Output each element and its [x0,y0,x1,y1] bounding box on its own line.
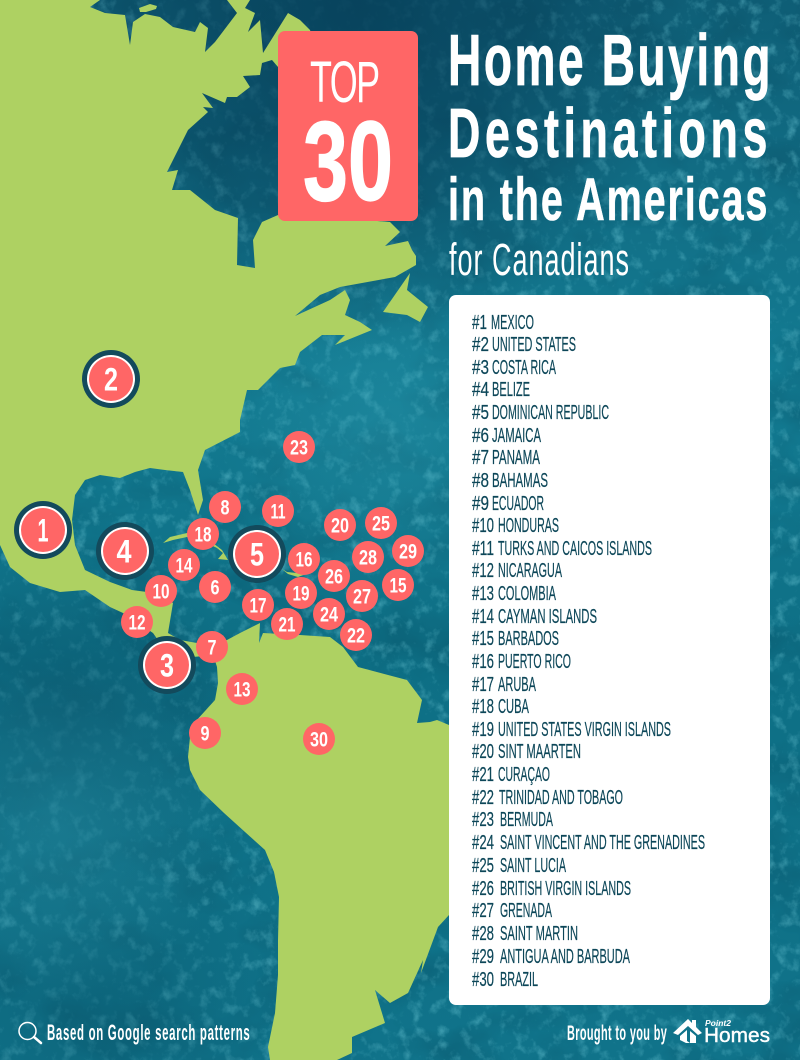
pin 4 [96,522,154,580]
list row 24: #24 [472,832,494,854]
pin 26: 26 [325,566,343,588]
badge: Top 30: TOP [310,50,380,115]
list row 29: ANTIGUA AND BARBUDA [500,946,630,968]
list row 13: COLOMBIA [498,583,556,605]
list row 29: #29 [472,946,494,968]
pin 27 [346,580,378,612]
pin 13: 13 [234,678,250,702]
title: in the Americas [448,166,767,233]
list row 9 [472,493,544,515]
list row 18: #18 [472,696,494,718]
pin 10: 10 [152,580,170,604]
list row 14: #14 [472,606,494,628]
list row 2: #2 [472,334,489,356]
list row 9: #9 [472,493,489,515]
list row 16: #16 [472,651,494,673]
icon: Point2 Homes house logo [673,1019,702,1043]
list row 16: PUERTO RICO [498,651,571,673]
pin 29 [392,535,424,567]
list row 24 [472,832,705,854]
pin 17 [242,589,274,621]
pin 25 [365,507,397,539]
list row 4: BELIZE [492,379,530,401]
pin 19 [285,577,317,609]
pin 16: 16 [296,548,312,572]
pin 16 [288,543,320,575]
list row 17: #17 [472,674,494,696]
pin 26 [318,560,350,592]
pin 28 [352,541,384,573]
list row 6: #6 [472,425,489,447]
list row 25: SAINT LUCIA [500,855,566,877]
pin 24: 24 [320,604,338,626]
pin 28: 28 [359,546,377,570]
list row 13: #13 [472,583,494,605]
list row 21 [472,764,550,786]
title: for Canadians [449,234,629,285]
pin 6: 6 [210,576,220,600]
pin 5 [228,525,286,583]
list row 7: #7 [472,447,489,469]
pin 24 [313,598,345,630]
badge: Top 30: 30 [303,98,393,224]
logo: Point2 Homes: Homes [704,1025,770,1047]
pin 25: 25 [372,512,390,536]
list row 19 [472,719,671,741]
list row 23: #23 [472,809,494,831]
pin 30 [303,723,335,755]
title [448,19,771,285]
list row 1 [472,312,534,334]
list row 22: TRINIDAD AND TOBAGO [499,787,623,809]
pin 22: 22 [347,624,365,648]
list row 7 [472,447,540,469]
list row 8: BAHAMAS [492,470,548,492]
list row 27: GRENADA [500,900,552,922]
pin 8 [209,491,241,523]
list row 14: CAYMAN ISLANDS [498,606,597,628]
pin 11: 11 [270,500,286,524]
list row 7: PANAMA [492,447,540,469]
pin 14 [168,549,200,581]
land: North America and Central America [0,0,416,660]
pin 15 [382,569,414,601]
pin 12: 12 [128,612,146,634]
pin 30: 30 [310,728,328,752]
list row 1: MEXICO [491,312,534,334]
pin 23 [283,431,315,463]
pin 7: 7 [208,636,216,660]
pin 23: 23 [290,436,308,460]
land: arctic island sliver [139,4,157,12]
list row 16 [472,651,571,673]
list row 30: #30 [472,969,494,991]
list row 23 [472,809,553,831]
list row 12: NICARAGUA [498,560,562,582]
list row 25: #25 [472,855,494,877]
icon: magnifying glass [19,1022,41,1043]
list row 13 [472,583,556,605]
list row 30: BRAZIL [500,969,538,991]
list row 19: #19 [472,719,494,741]
source note: Based on Google search patterns [47,1020,250,1045]
list row 4 [472,379,530,401]
list row 18: CUBA [498,696,529,718]
list row 14 [472,606,597,628]
title: Destinations [448,95,767,172]
pin 14: 14 [176,554,193,578]
list row 10: #10 [472,515,494,537]
land: Hispaniola fragment [282,569,306,577]
pin 12 [121,606,153,638]
list row 15: BARBADOS [498,628,559,650]
list row 10: HONDURAS [498,515,559,537]
list row 30 [472,969,538,991]
list row 23: BERMUDA [500,809,553,831]
list row 22 [472,787,623,809]
pin 29: 29 [399,540,417,564]
list row 6: JAMAICA [492,425,541,447]
list row 5 [472,402,609,424]
list row 15 [472,628,559,650]
pin 9: 9 [200,722,210,746]
pin 10 [145,575,177,607]
land: Cuba [163,533,228,560]
pin 15: 15 [390,574,407,598]
list row 22: #22 [472,787,494,809]
pin 11 [262,495,294,527]
list row 18 [472,696,529,718]
list row 26 [472,878,631,900]
pin 2 [82,350,140,408]
pin 18 [187,518,219,550]
list row 20 [472,741,581,763]
pin 2: 2 [104,362,118,398]
list row 15: #15 [472,628,494,650]
pin 8: 8 [220,496,230,520]
pin 1 [14,501,72,559]
list row 1: #1 [472,312,487,334]
list row 9: ECUADOR [492,493,544,515]
badge: Top 30 [278,31,418,224]
pin 5: 5 [250,536,264,572]
pin 17: 17 [250,594,266,618]
pin 7 [196,631,228,663]
list row 3: COSTA RICA [492,357,556,379]
panel: ranked destination list [449,295,770,1005]
list row 28 [472,923,578,945]
list row 21: CURAÇAO [498,764,550,786]
list row 5: DOMINICAN REPUBLIC [492,402,609,424]
list row 27: #27 [472,900,494,922]
pin 18: 18 [194,524,212,546]
list row 17 [472,674,536,696]
pin 6 [199,571,231,603]
list row 11: TURKS AND CAICOS ISLANDS [498,538,652,560]
list row 3: #3 [472,357,489,379]
list row 5: #5 [472,402,489,424]
list row 10 [472,515,559,537]
pin 9 [189,717,221,749]
title: Home Buying [448,19,771,100]
pin 13 [226,673,258,705]
list row 8 [472,470,548,492]
pin 4: 4 [116,534,132,570]
list row 20: SINT MAARTEN [498,741,581,763]
credit text: Brought to you by [567,1021,667,1045]
pin 1: 1 [38,512,48,548]
list row 2 [472,334,576,356]
pin 27: 27 [353,586,371,608]
pin 20: 20 [331,514,349,538]
list row 11: #11 [472,538,494,560]
land: South America [188,623,449,1060]
list row 12 [472,560,562,582]
list row 21: #21 [472,764,494,786]
pin 20 [324,509,356,541]
pin 21 [271,608,303,640]
list row 11 [472,538,652,560]
list row 8: #8 [472,470,489,492]
pin 19: 19 [292,582,310,606]
list row 27 [472,900,552,922]
map landmasses [0,0,449,1060]
list row 26: #26 [472,878,494,900]
list row 26: BRITISH VIRGIN ISLANDS [500,878,631,900]
list row 4: #4 [472,379,489,401]
list row 12: #12 [472,560,494,582]
pin 3 [138,636,196,694]
pin 22 [340,619,372,651]
list row 2: UNITED STATES [492,334,576,356]
pins [14,350,424,755]
list row 29 [472,946,630,968]
list row 20: #20 [472,741,494,763]
pin 21: 21 [278,614,296,636]
logo: Point2 Homes: Point2 [705,1019,732,1028]
list row 28: #28 [472,923,494,945]
list row 28: SAINT MARTIN [500,923,578,945]
land: Atlantic Canada island [383,273,428,322]
list row 6 [472,425,541,447]
list row 17: ARUBA [498,674,536,696]
pin 3: 3 [160,648,174,684]
list row 3 [472,357,556,379]
list row 25 [472,855,566,877]
